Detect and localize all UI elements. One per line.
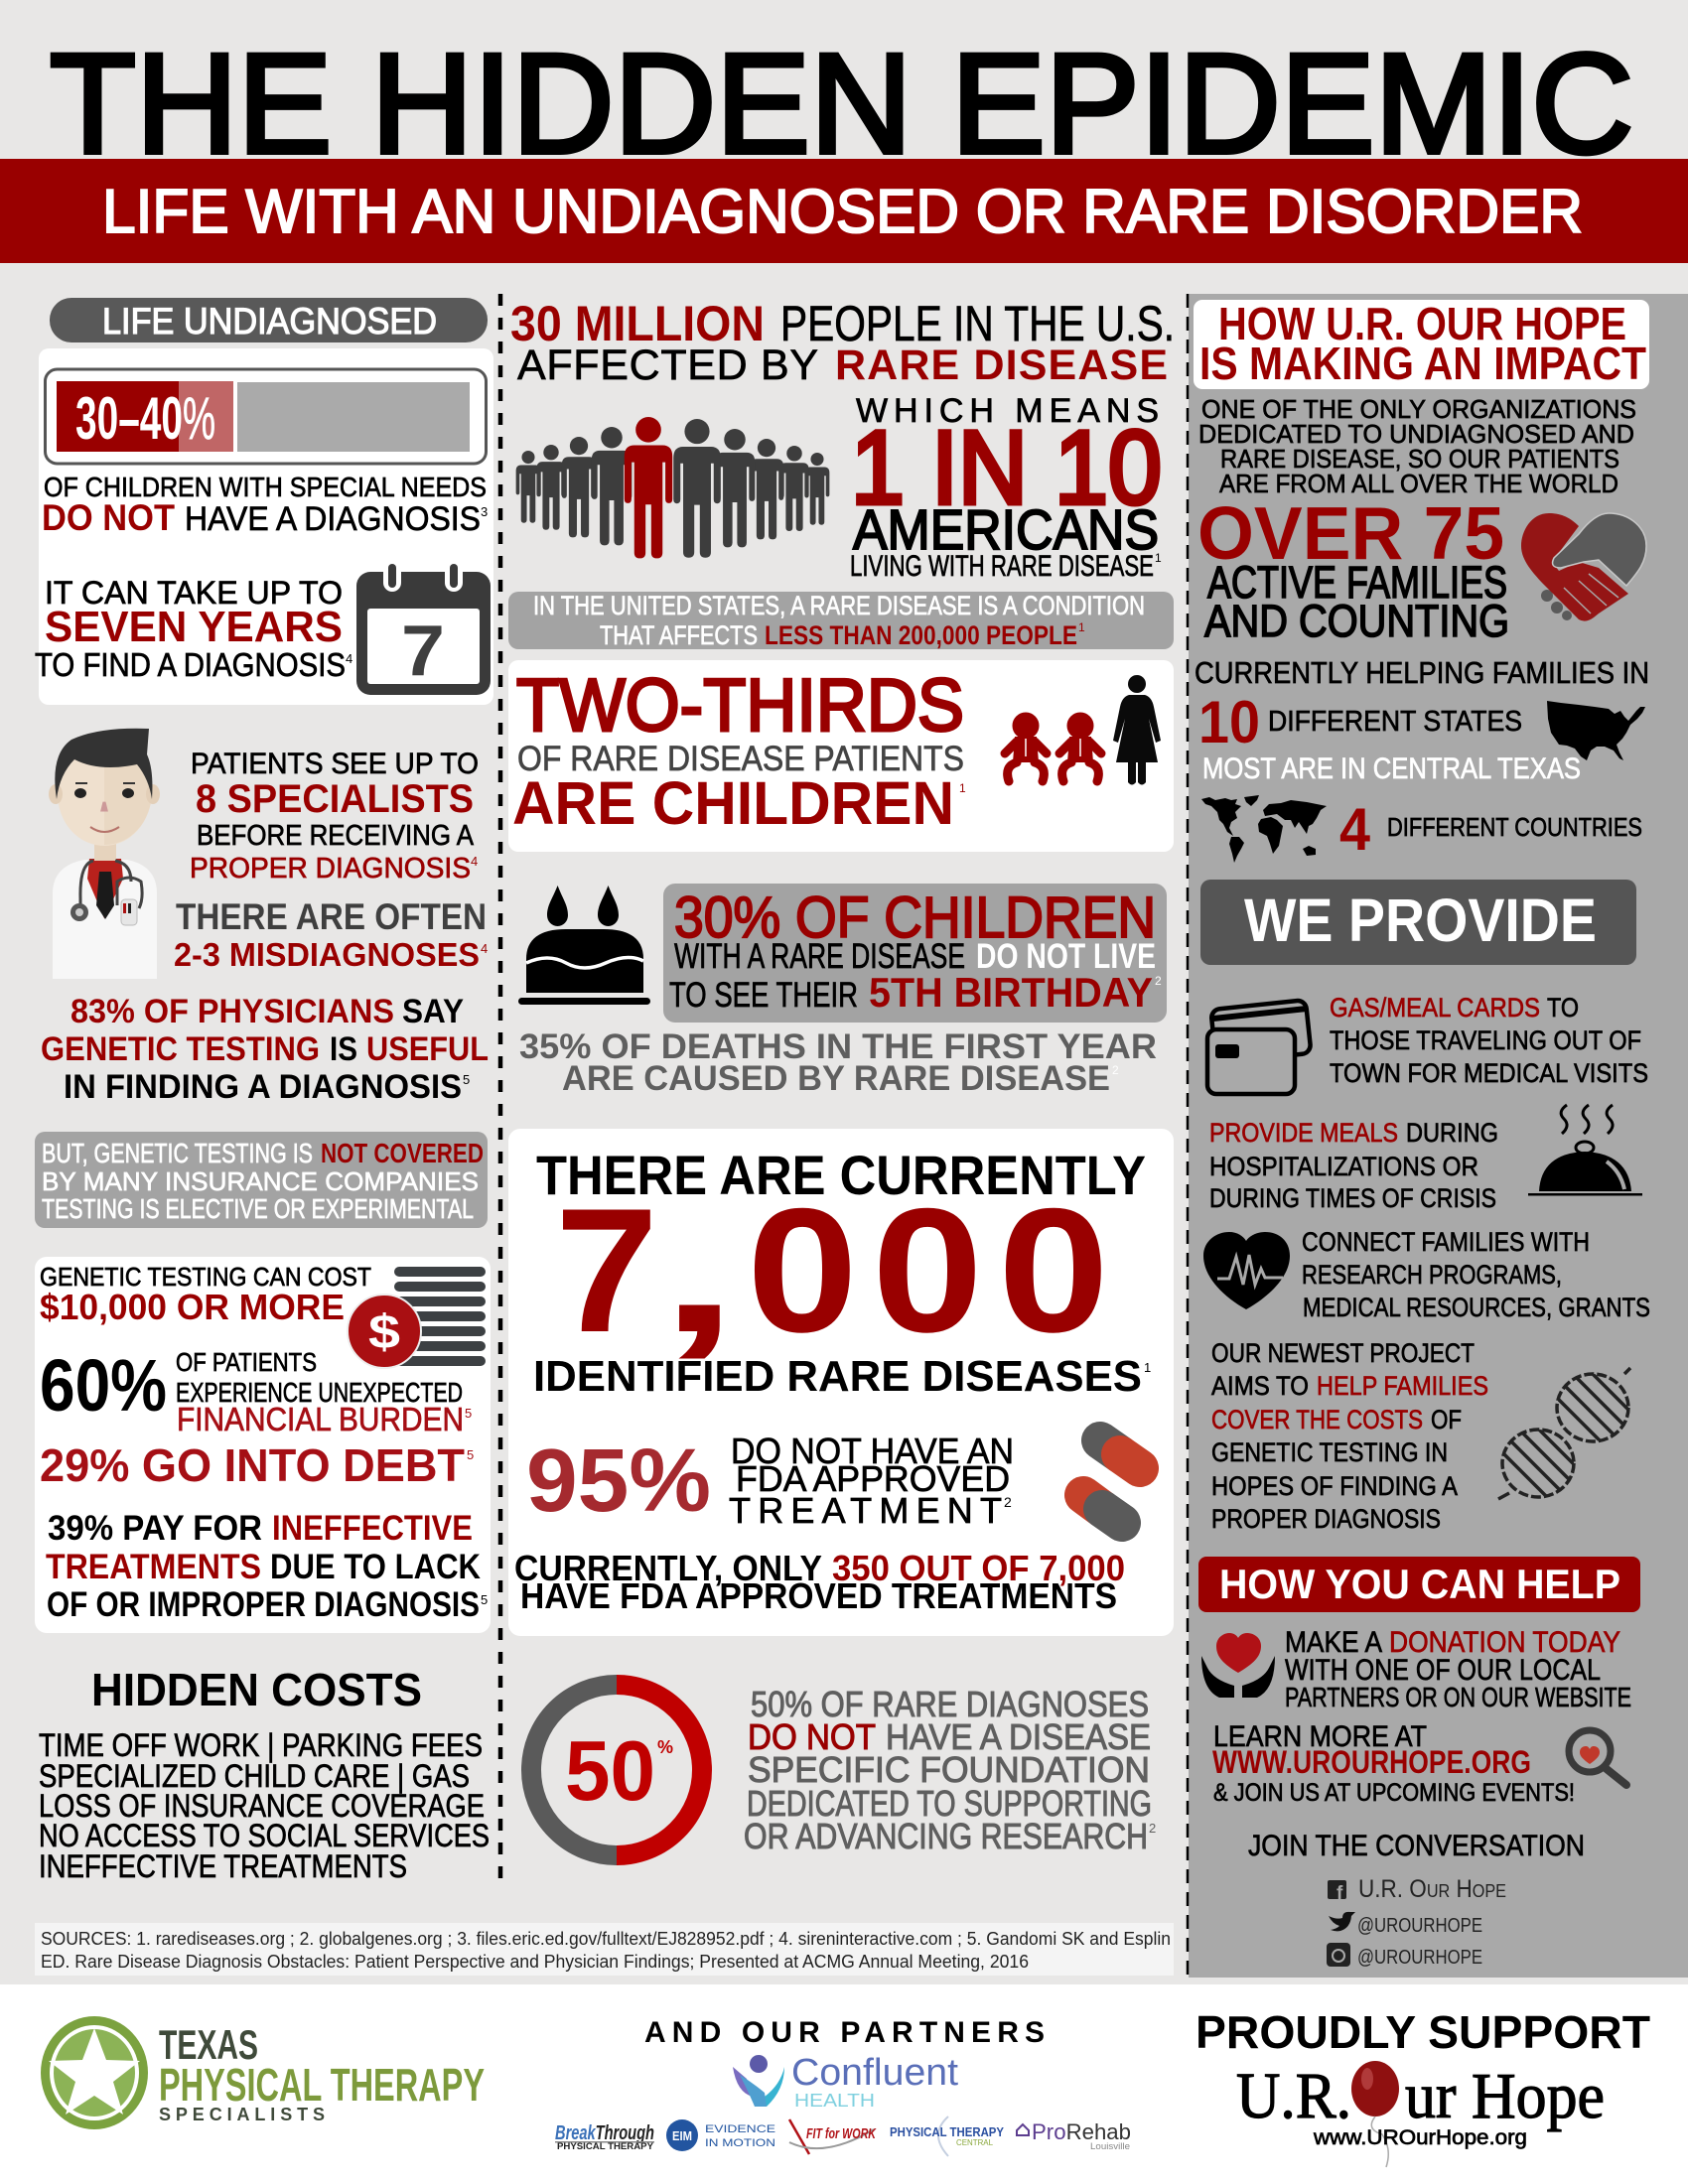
text: 50 percent no foundation: 2 — [1149, 1821, 1156, 1836]
text: hidden costs: INEFFECTIVE TREATMENTS — [39, 1848, 407, 1884]
sources: ED. Rare Disease Diagnosis Obstacles: Patient Perspective and Physician Findings; Presented at ACMG Annual Meeting, 2016 — [41, 1952, 1029, 1972]
icon: money stack: $ — [368, 1306, 400, 1359]
text: hidden costs — [39, 1664, 490, 1884]
panel: how U.R. Our Hope is making an impact heading: IS MAKING AN IMPACT — [1199, 338, 1646, 389]
text: 50 percent no foundation: DO NOT — [748, 1716, 876, 1757]
text: 50 percent no foundation: SPECIFIC FOUNDATION — [748, 1749, 1150, 1790]
panel: two-thirds are children: OF RARE DISEASE PATIENTS — [517, 740, 964, 778]
text: learn more: WWW.UROURHOPE.ORG — [1212, 1744, 1531, 1780]
text: 350 of 7,000 — [514, 1548, 1125, 1616]
text: newest project: COVER THE COSTS — [1211, 1405, 1423, 1434]
text: seven years to diagnosis — [35, 575, 352, 683]
panel: two-thirds are children: ARE CHILDREN — [512, 769, 954, 837]
text: four countries: 4 — [1339, 796, 1371, 863]
text: newest project: AIMS TO — [1211, 1371, 1309, 1401]
icon: credit cards — [1207, 1000, 1311, 1094]
panel: two-thirds are children: TWO-THIRDS — [516, 663, 964, 747]
text: eight specialists: PROPER DIAGNOSIS — [190, 853, 471, 885]
text: 50 percent no foundation — [744, 1684, 1156, 1856]
text: physicians on genetic testing: GENETIC TESTING — [41, 1030, 320, 1068]
sources — [35, 1923, 1174, 1976]
icon: birthday cake — [518, 886, 650, 1005]
logo: Texas Physical Therapy Specialists: PHYSICAL THERAPY — [159, 2059, 485, 2111]
text: 95 percent no treatment: TREATMENT — [729, 1490, 1002, 1531]
social links: U.R. OUR HOPE — [1358, 1875, 1506, 1903]
icon: hands holding heart — [1201, 1633, 1275, 1698]
panel: 30 percent of children — [663, 884, 1167, 1023]
social links: @UROURHOPE — [1357, 1915, 1482, 1937]
panel: not covered by insurance: BUT, GENETIC TESTING IS — [42, 1138, 313, 1168]
text: connect families — [1302, 1227, 1650, 1322]
text: make a donation: DONATION TODAY — [1389, 1626, 1620, 1659]
callout: definition of rare disease: IN THE UNITED STATES, A RARE DISEASE IS A CONDITION — [533, 591, 1145, 620]
text: over 75 families — [1197, 491, 1509, 646]
text: do not have a diagnosis — [42, 472, 488, 538]
text: 29 percent into debt: 5 — [467, 1447, 474, 1462]
icon: pills — [1083, 1440, 1140, 1523]
text: 350 of 7,000: CURRENTLY, ONLY — [514, 1548, 822, 1588]
text: 35 percent of deaths: ARE CAUSED BY RARE DISEASE — [562, 1059, 1110, 1098]
text: proudly support: PROUDLY SUPPORT — [1196, 2006, 1650, 2058]
text: helping families in states: DIFFERENT STATES — [1268, 706, 1522, 738]
logo: ProRehab: ProRehab — [1032, 2119, 1131, 2144]
logo: ProRehab: Louisville — [1090, 2141, 1130, 2151]
heading: 30 million: RARE DISEASE — [835, 341, 1168, 389]
text: gas and meal cards: TOWN FOR MEDICAL VISITS — [1330, 1058, 1648, 1088]
text: do not have a diagnosis: HAVE A DIAGNOSIS — [185, 500, 481, 538]
heading: 30 million: AFFECTED BY — [517, 341, 818, 389]
text: 95 percent no treatment — [526, 1431, 1014, 1531]
social links: f — [1336, 1883, 1343, 1904]
text: join the conversation: JOIN THE CONVERSATION — [1248, 1830, 1585, 1862]
panel: not covered by insurance: BY MANY INSURANCE COMPANIES — [42, 1166, 479, 1196]
text: physicians on genetic testing: USEFUL — [366, 1030, 489, 1068]
text: make a donation: MAKE A — [1285, 1626, 1382, 1659]
callout: definition of rare disease: 1 — [1078, 620, 1085, 634]
text: do not have a diagnosis: 3 — [481, 504, 488, 519]
text: learn more — [1212, 1720, 1575, 1807]
text: 1 in 10 americans: 1 — [1155, 551, 1162, 565]
text: 1 in 10 americans: LIVING WITH RARE DISEASE — [850, 550, 1154, 583]
heading: 30 million: PEOPLE IN THE U.S. — [780, 296, 1175, 351]
text: 39 percent ineffective treatments — [46, 1509, 488, 1624]
logo: Texas Physical Therapy Specialists: SPECIALISTS — [159, 2105, 325, 2124]
big number: 7,000: 0 — [998, 1171, 1109, 1369]
text: connect families: RESEARCH PROGRAMS, — [1302, 1260, 1562, 1290]
text: 1 in 10 americans: 1 IN 10 — [851, 410, 1162, 526]
callout: definition of rare disease — [508, 591, 1174, 650]
logo: Evidence in Motion: IN MOTION — [705, 2137, 775, 2149]
text: physicians on genetic testing: IN FINDING A DIAGNOSIS — [64, 1068, 462, 1106]
big number: 7,000 — [555, 1171, 1109, 1369]
icon: row of people — [516, 417, 829, 558]
panel: 7,000 rare diseases — [508, 1129, 1174, 1636]
icon: calendar — [356, 562, 491, 695]
panel: 30 percent of children: TO SEE THEIR — [669, 976, 858, 1015]
text: 95 percent no treatment: FDA APPROVED — [736, 1458, 1010, 1499]
logo: Evidence in Motion: EVIDENCE — [705, 2123, 775, 2135]
callout: definition of rare disease: THAT AFFECTS — [600, 620, 758, 650]
logo: Texas Physical Therapy Specialists: TEXAS — [159, 2021, 258, 2068]
icon: woman — [1113, 675, 1161, 784]
logo: BreakThrough Physical Therapy — [555, 2122, 654, 2151]
text: 50 percent no foundation: OR ADVANCING RESEARCH — [744, 1816, 1148, 1856]
text: seven years to diagnosis: TO FIND A DIAGNOSIS — [35, 646, 346, 683]
text: 95 percent no treatment: 2 — [1004, 1494, 1012, 1510]
panel: 30 percent of children: 30% OF CHILDREN — [674, 886, 1156, 950]
text: 39 percent ineffective treatments: DUE TO LACK — [270, 1548, 481, 1586]
text: helping families in states — [1195, 655, 1649, 785]
text: organization description — [1198, 394, 1636, 498]
logo: Confluent Health: HEALTH — [794, 2091, 875, 2111]
text: organization description: DEDICATED TO UNDIAGNOSED AND — [1198, 419, 1634, 449]
text: organization description: RARE DISEASE, SO OUR PATIENTS — [1220, 444, 1619, 474]
social links — [1327, 1875, 1506, 1969]
logo: Confluent Health — [733, 2052, 958, 2111]
text: 60 percent financial burden: 5 — [465, 1406, 472, 1421]
subtitle banner — [0, 159, 1688, 263]
panel: how U.R. Our Hope is making an impact heading — [1194, 298, 1649, 389]
donut chart: 50 percent: 50 — [565, 1724, 655, 1819]
logo: Evidence in Motion: EIM — [672, 2128, 692, 2143]
logo: Physical Therapy Central: PHYSICAL THERAPY — [890, 2124, 1004, 2139]
logo: Texas Physical Therapy Specialists — [41, 2016, 485, 2129]
icon: calendar: 7 — [401, 612, 445, 691]
text: misdiagnoses: 4 — [481, 941, 488, 956]
text: newest project — [1211, 1338, 1488, 1534]
logo: U.R. Our Hope: www.UROurHope.org — [1313, 2126, 1527, 2149]
text: organization description: ONE OF THE ONLY ORGANIZATIONS — [1201, 394, 1636, 424]
text: seven years to diagnosis: SEVEN YEARS — [45, 603, 343, 651]
text: 95 percent no treatment: DO NOT HAVE AN — [731, 1431, 1014, 1471]
panel: 30 percent of children: 2 — [1155, 974, 1162, 988]
text: gas and meal cards: GAS/MEAL CARDS — [1330, 993, 1540, 1023]
logo: BreakThrough Physical Therapy: PHYSICAL THERAPY — [557, 2141, 653, 2151]
logo: U.R. Our Hope: ur Hope — [1405, 2060, 1605, 2132]
panel: 30 percent of children: DO NOT LIVE — [976, 937, 1156, 976]
title: THE HIDDEN EPIDEMIC — [50, 26, 1633, 183]
text: make a donation — [1285, 1626, 1631, 1712]
text: 95 percent no treatment: 95% — [526, 1432, 711, 1531]
panel: 7,000 rare diseases: 1 — [1144, 1360, 1151, 1375]
text: provide meals: DURING TIMES OF CRISIS — [1209, 1183, 1496, 1213]
icon: handshake heart — [1521, 513, 1646, 621]
text: hidden costs: TIME OFF WORK | PARKING FEES — [39, 1727, 483, 1763]
text: do not have a diagnosis: DO NOT — [42, 497, 175, 538]
subtitle banner: LIFE WITH AN UNDIAGNOSED OR RARE DISORDER — [102, 178, 1583, 246]
logo: Confluent Health: Confluent — [791, 2052, 958, 2094]
text: hidden costs: NO ACCESS TO SOCIAL SERVICES — [39, 1818, 490, 1853]
panel: 7,000 rare diseases: THERE ARE CURRENTLY — [536, 1144, 1146, 1206]
icon: cloche — [1528, 1105, 1642, 1195]
logo: U.R. Our Hope: U.R. — [1236, 2060, 1351, 2132]
text: 39 percent ineffective treatments: INEFFECTIVE — [272, 1509, 473, 1548]
text: eight specialists: 4 — [471, 854, 478, 869]
logo: Fit for Work: FIT for WORK — [806, 2125, 877, 2142]
text: eight specialists: BEFORE RECEIVING A — [197, 820, 475, 852]
text: 39 percent ineffective treatments: OF OR IMPROPER DIAGNOSIS — [47, 1585, 480, 1624]
panel: children without diagnosis and seven years — [35, 348, 493, 705]
text: provide meals: HOSPITALIZATIONS OR — [1209, 1152, 1478, 1181]
text: newest project: HELP FAMILIES — [1317, 1371, 1488, 1401]
text: four countries — [1339, 796, 1642, 863]
text: 60 percent financial burden: 60% — [40, 1344, 167, 1427]
text: 35 percent of deaths: 35% OF DEATHS IN THE FIRST YEAR — [519, 1027, 1157, 1066]
text: 50 percent no foundation: DEDICATED TO SUPPORTING — [747, 1783, 1152, 1824]
text: learn more: LEARN MORE AT — [1213, 1720, 1427, 1753]
callout: definition of rare disease: LESS THAN 200,000 PEOPLE — [765, 620, 1077, 650]
panel: not covered by insurance: NOT COVERED — [321, 1138, 484, 1168]
text: 1 in 10 americans — [850, 392, 1162, 583]
text: provide meals: PROVIDE MEALS — [1209, 1118, 1398, 1148]
text: eight specialists — [190, 748, 479, 885]
text: 60 percent financial burden: OF PATIENTS — [176, 1347, 317, 1377]
text: over 75 families: OVER 75 — [1197, 491, 1504, 575]
column dividers — [500, 294, 1188, 1978]
text: physicians on genetic testing: 5 — [463, 1072, 470, 1087]
text: 29 percent into debt: 29% GO INTO DEBT — [40, 1439, 465, 1491]
heading: we provide: WE PROVIDE — [1244, 887, 1597, 954]
social links: @UROURHOPE — [1357, 1947, 1482, 1969]
sources: SOURCES: 1. rarediseases.org ; 2. globalgenes.org ; 3. files.eric.ed.gov/fulltext/EJ828952.pdf ; 4. sireninteractive.com ; 5. Gandomi SK and Esplin — [41, 1929, 1171, 1949]
text: hidden costs: HIDDEN COSTS — [91, 1664, 422, 1715]
heading: 30 million: 30 MILLION — [510, 296, 765, 351]
text: 50 percent no foundation: HAVE A DISEASE — [886, 1716, 1151, 1757]
text: physicians on genetic testing: IS — [330, 1030, 357, 1068]
text: cost of testing — [40, 1262, 371, 1327]
logo: Physical Therapy Central: CENTRAL — [956, 2138, 994, 2147]
text: 60 percent financial burden: EXPERIENCE UNEXPECTED — [176, 1377, 463, 1408]
progress bar: 30-40%: 30–40 — [75, 385, 183, 452]
text: cost of testing: GENETIC TESTING CAN COST — [40, 1262, 371, 1292]
panel: two-thirds are children — [508, 660, 1174, 852]
big number: 7,000: , — [659, 1171, 739, 1369]
heading: and our partners: AND OUR PARTNERS — [644, 2016, 1045, 2049]
text: 39 percent ineffective treatments: 39% PAY FOR — [48, 1509, 262, 1548]
text: 350 of 7,000: HAVE FDA APPROVED TREATMENTS — [520, 1575, 1117, 1616]
text: newest project: PROPER DIAGNOSIS — [1211, 1504, 1441, 1534]
panel: 30 percent of children: WITH A RARE DISEASE — [674, 937, 965, 976]
text: newest project: OF — [1431, 1405, 1462, 1434]
text: newest project: OUR NEWEST PROJECT — [1211, 1338, 1475, 1368]
donut chart: 50 percent: % — [657, 1737, 673, 1757]
text: helping families in states: MOST ARE IN CENTRAL TEXAS — [1202, 752, 1581, 785]
icon: US map — [1547, 701, 1645, 760]
big number: 7,000: 0 — [872, 1171, 983, 1369]
panel: how U.R. Our Hope is making an impact heading: HOW U.R. OUR HOPE — [1218, 298, 1626, 349]
text: learn more: & JOIN US AT UPCOMING EVENTS! — [1213, 1779, 1575, 1807]
text: physicians on genetic testing: SAY — [402, 993, 464, 1030]
text: newest project: GENETIC TESTING IN — [1211, 1437, 1448, 1467]
text: 60 percent financial burden: FINANCIAL BURDEN — [177, 1401, 464, 1437]
text: cost of testing: $10,000 OR MORE — [40, 1287, 345, 1327]
text: misdiagnoses: THERE ARE OFTEN — [176, 896, 487, 937]
text: gas and meal cards: TO — [1547, 993, 1579, 1023]
progress bar: 30-40%: % — [183, 385, 215, 452]
panel: not covered by insurance — [35, 1132, 488, 1228]
logo: U.R. Our Hope — [1236, 2060, 1605, 2167]
big number: 7,000: 0 — [747, 1171, 858, 1369]
text: seven years to diagnosis: IT CAN TAKE UP TO — [45, 575, 343, 611]
text: hidden costs: LOSS OF INSURANCE COVERAGE — [39, 1788, 485, 1824]
panel: two-thirds are children: 1 — [959, 781, 966, 795]
footer band — [0, 1984, 1688, 2184]
text: 1 in 10 americans: WHICH MEANS — [856, 392, 1159, 430]
logo: Fit for Work — [789, 2119, 877, 2154]
text: 39 percent ineffective treatments: 5 — [481, 1592, 488, 1607]
text: eight specialists: 8 SPECIALISTS — [196, 777, 474, 821]
heading: 30 million — [510, 296, 1175, 389]
text: provide meals — [1209, 1118, 1498, 1213]
text: gas and meal cards: THOSE TRAVELING OUT OF — [1330, 1025, 1641, 1055]
text: do not have a diagnosis: OF CHILDREN WITH SPECIAL NEEDS — [44, 472, 487, 502]
donut chart: 50 percent — [531, 1685, 702, 1855]
icon: DNA helix — [1497, 1366, 1632, 1501]
icon: babies — [1005, 713, 1101, 781]
text: connect families: CONNECT FAMILIES WITH — [1302, 1227, 1590, 1257]
text: gas and meal cards — [1330, 993, 1648, 1088]
logo: Physical Therapy Central — [890, 2116, 1004, 2156]
text: eight specialists: PATIENTS SEE UP TO — [191, 748, 479, 780]
logo: BreakThrough Physical Therapy: BreakThrough — [555, 2122, 654, 2144]
panel: 7,000 rare diseases: IDENTIFIED RARE DISEASES — [533, 1352, 1142, 1401]
icon: heart with pulse — [1203, 1232, 1290, 1309]
text: 350 of 7,000: 350 OUT OF 7,000 — [832, 1548, 1125, 1588]
text: over 75 families: AND COUNTING — [1204, 596, 1509, 646]
text: provide meals: DURING — [1406, 1118, 1498, 1148]
text: organization description: ARE FROM ALL OVER THE WORLD — [1219, 469, 1618, 498]
icon: world map — [1201, 795, 1327, 863]
text: physicians on genetic testing: 83% OF PHYSICIANS — [70, 993, 394, 1030]
text: four countries: DIFFERENT COUNTRIES — [1387, 812, 1642, 842]
text: 50 percent no foundation: 50% OF RARE DIAGNOSES — [751, 1684, 1149, 1724]
text: hidden costs: SPECIALIZED CHILD CARE | GAS — [39, 1758, 470, 1794]
panel: costs of testing — [35, 1257, 491, 1633]
icon: money stack — [348, 1267, 486, 1368]
text: make a donation: WITH ONE OF OUR LOCAL — [1285, 1654, 1601, 1687]
panel: life undiagnosed heading: LIFE UNDIAGNOSED — [102, 301, 437, 341]
text: helping families in states: 10 — [1198, 689, 1260, 755]
text: over 75 families: ACTIVE FAMILIES — [1207, 557, 1507, 608]
text: 60 percent financial burden — [40, 1344, 472, 1437]
logo: Evidence in Motion — [666, 2119, 775, 2151]
text: 35 percent of deaths: 2 — [1112, 1063, 1119, 1077]
right column background panel — [1189, 294, 1688, 1978]
icon: doctor — [49, 729, 160, 979]
text: 35 percent of deaths — [519, 1027, 1157, 1098]
logo: ProRehab — [1017, 2119, 1131, 2151]
big number: 7,000: 7 — [555, 1171, 658, 1369]
text: newest project: HOPES OF FINDING A — [1211, 1471, 1458, 1501]
progress bar: 30-40% — [46, 369, 487, 464]
text: seven years to diagnosis: 4 — [346, 651, 352, 666]
icon: magnifying glass — [1569, 1730, 1626, 1785]
text: physicians on genetic testing — [41, 993, 489, 1106]
heading: how you can help: HOW YOU CAN HELP — [1219, 1561, 1620, 1607]
text: misdiagnoses — [174, 896, 488, 973]
text: 1 in 10 americans: AMERICANS — [853, 498, 1159, 562]
panel: not covered by insurance: TESTING IS ELECTIVE OR EXPERIMENTAL — [42, 1193, 474, 1224]
text: 39 percent ineffective treatments: TREATMENTS — [46, 1548, 261, 1586]
text: misdiagnoses: 2-3 MISDIAGNOSES — [174, 936, 480, 973]
panel: 30 percent of children: 5TH BIRTHDAY — [869, 969, 1153, 1016]
